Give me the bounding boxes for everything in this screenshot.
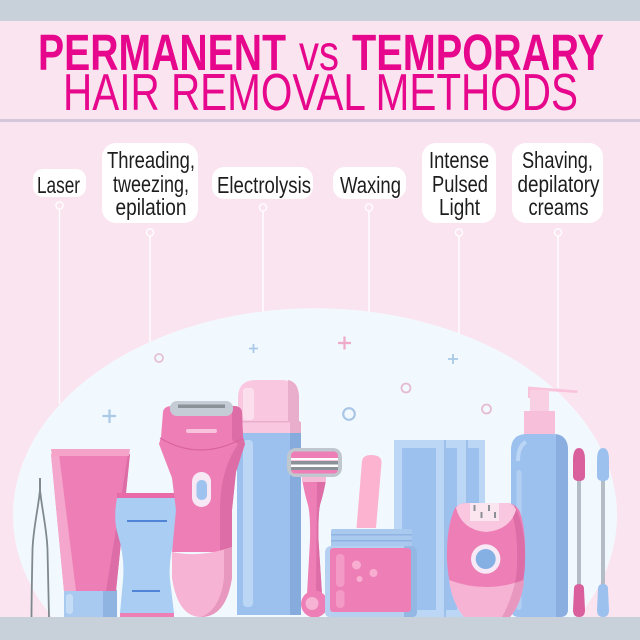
label: threading, tweezing, epilation: Threading, [107,147,195,173]
pump bottle [511,386,578,617]
top grey band [0,0,640,21]
cotton swab: blue [597,448,609,617]
cotton swab: pink [573,448,585,617]
label: waxing: Waxing [340,172,401,198]
tweezers [32,478,49,617]
roll-on bottle [115,493,178,617]
decorative circles and plus signs [102,336,491,423]
label: threading, tweezing, epilation [102,143,198,223]
label: intense pulsed light: Pulsed [432,171,488,197]
label: shaving, depilatory creams [512,143,603,223]
label: laser: Laser [37,172,80,198]
aerosol can [237,380,301,615]
background ellipse [13,308,617,617]
label: shaving, depilatory creams: depilatory [518,171,600,197]
cream tube [51,449,130,617]
label: intense pulsed light: Light [439,194,481,220]
bottom grey shelf [0,617,640,640]
title [38,24,604,122]
electric shaver [159,401,245,617]
label: electrolysis [212,167,313,199]
epilator [447,503,525,617]
label: waxing [333,167,406,199]
title: PERMANENT [38,24,286,81]
label: electrolysis: Electrolysis [217,172,311,198]
title: vs [299,25,339,81]
label: shaving, depilatory creams: Shaving, [522,147,593,173]
razor [287,448,342,618]
connector lines [56,202,562,404]
label: intense pulsed light: Intense [429,147,489,173]
label: threading, tweezing, epilation: tweezing, [113,171,189,197]
wax jar with spatula [325,455,417,617]
wax strips [394,440,485,617]
label: threading, tweezing, epilation: epilation [116,194,186,220]
label: shaving, depilatory creams: creams [528,194,588,220]
label: intense pulsed light [422,143,496,223]
